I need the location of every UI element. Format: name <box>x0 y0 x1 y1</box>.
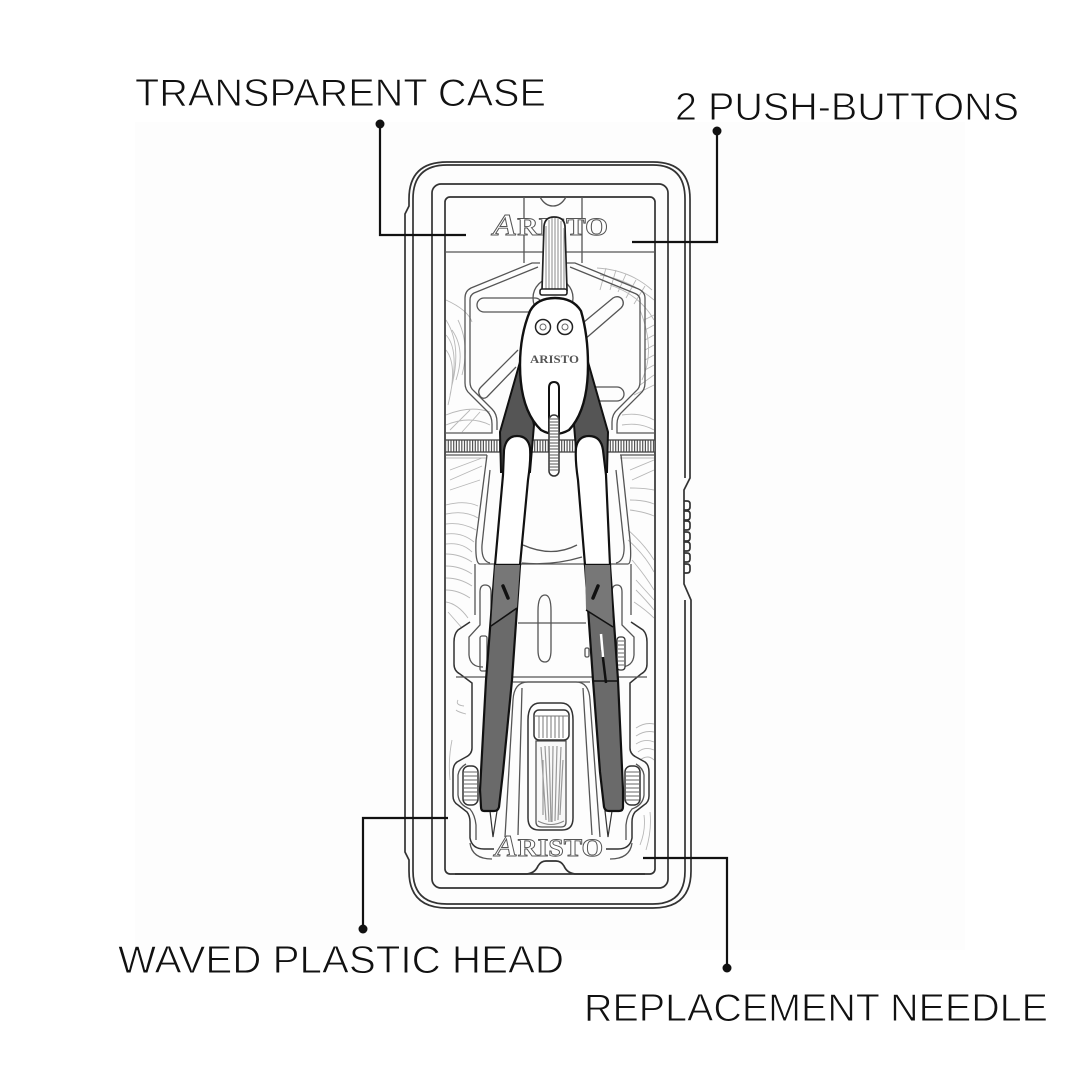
logo: ARISTO top: ARISTO <box>491 207 608 242</box>
compass <box>480 217 623 837</box>
outer case shell <box>405 162 691 908</box>
callout: waved plastic head: WAVED PLASTIC HEAD <box>118 939 564 982</box>
waved head knobs <box>463 637 640 805</box>
callout: replacement needle: REPLACEMENT NEEDLE <box>584 987 1048 1030</box>
head <box>520 298 588 434</box>
infographic <box>118 79 1046 1021</box>
replacement needle tube <box>505 682 600 837</box>
callout: replacement needle <box>584 858 1048 1030</box>
top knob <box>540 217 567 295</box>
wave pattern on tray <box>446 268 654 850</box>
dark compass arms <box>500 362 608 472</box>
logo: ARISTO bottom: ARISTO <box>493 828 603 863</box>
callout: 2 push-buttons: 2 PUSH-BUTTONS <box>675 86 1019 129</box>
callout: transparent case: TRANSPARENT CASE <box>135 72 546 115</box>
threaded adjustment bar <box>445 440 655 452</box>
tray lower moulding <box>446 455 654 874</box>
left leg <box>480 436 530 811</box>
panel: transparent case <box>405 162 691 908</box>
logo: ARISTO on head: ARISTO <box>530 352 579 366</box>
side grip ridges <box>684 501 690 573</box>
callout: transparent case <box>135 72 546 235</box>
right leg <box>576 436 623 811</box>
callout: waved plastic head <box>118 818 564 982</box>
needle points <box>490 811 612 837</box>
centre adjustment wheel <box>549 415 559 476</box>
centre slot <box>549 382 559 432</box>
tray upper moulding <box>445 197 655 433</box>
push-buttons <box>536 320 572 334</box>
callout: 2 push-buttons <box>632 86 1019 242</box>
